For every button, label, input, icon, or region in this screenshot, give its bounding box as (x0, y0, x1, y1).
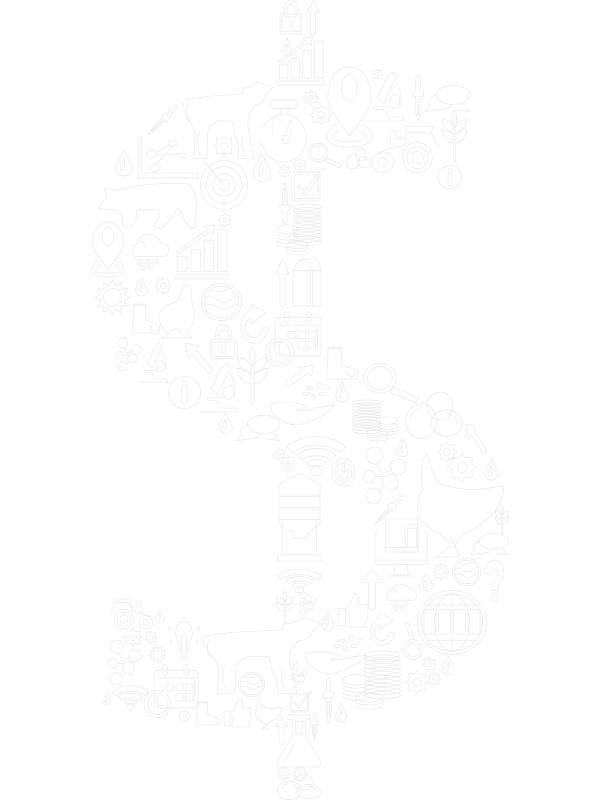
icon: speech bubbles (237, 415, 280, 441)
icon: drop (485, 459, 498, 480)
icon: refresh (370, 613, 395, 645)
icon: clock (144, 690, 171, 718)
icon: hand (305, 652, 367, 674)
icon: drop (420, 573, 432, 591)
icon: gear (422, 657, 436, 672)
icon: gear (303, 90, 319, 105)
icon: gear (278, 165, 291, 178)
icon: gear (155, 277, 171, 295)
icon: seeds (302, 382, 330, 399)
icon: info (438, 165, 462, 189)
icon: gear (213, 135, 235, 157)
icon: pipette (323, 677, 334, 724)
icon: drop (443, 656, 454, 675)
icon: pipette (311, 712, 318, 740)
icon: calendar (154, 665, 198, 708)
icon: wheat (442, 110, 467, 162)
icon: microscope (139, 343, 168, 382)
icon: gear (178, 710, 191, 722)
icon: question mark (484, 560, 504, 602)
icon: coins (343, 651, 400, 709)
icon: seeds (333, 635, 363, 651)
icon: clock (265, 338, 294, 367)
icon: gear (310, 105, 332, 125)
icon: wifi (277, 570, 322, 593)
icon: eggs (346, 149, 371, 169)
icon: molecule (299, 592, 317, 615)
icon: drop (219, 413, 232, 433)
icon: sun (95, 280, 130, 315)
icon: speech bubbles (470, 533, 508, 555)
icon: arrow (185, 343, 213, 374)
icon: eggs (277, 775, 321, 800)
icon: gear (273, 448, 285, 460)
icon: globe (418, 591, 486, 654)
icon: drop (397, 439, 407, 457)
icon: gear (280, 455, 296, 473)
icon: speech bubbles (425, 85, 470, 112)
icon: molecule (108, 640, 141, 685)
icon: magnifier (404, 623, 422, 660)
icon: lock (210, 325, 237, 359)
icon: molecule (363, 447, 406, 504)
icon: gear (293, 158, 307, 172)
icon: cow (183, 82, 273, 158)
icon: gear (372, 69, 383, 80)
icon: calendar (275, 312, 321, 356)
icon: up arrow (363, 569, 381, 610)
icon: magnifier (364, 363, 419, 403)
icon: microscope (201, 363, 238, 412)
icon: drop (253, 153, 271, 182)
icon: up arrow (276, 258, 289, 307)
icon: hen (255, 697, 282, 729)
icon: clock (293, 767, 307, 781)
icon: drop (336, 382, 348, 402)
icon: boot (327, 347, 358, 379)
icon: up arrow (275, 717, 288, 745)
icon: gear (428, 672, 441, 686)
icon: coins (277, 204, 322, 255)
icon: globe dish (201, 283, 242, 321)
icon: tractor (372, 126, 439, 173)
icon: microscope (367, 72, 404, 121)
icon: cloud (387, 584, 417, 610)
icon: gear (218, 213, 232, 227)
icon: gear (405, 670, 429, 694)
icon: wheat (237, 347, 268, 405)
icon: drop (136, 277, 147, 296)
icon: light bulb (168, 617, 200, 661)
icon: coins (352, 400, 398, 441)
icon: bar chart (175, 225, 228, 279)
icon: globe dish (452, 558, 481, 586)
icon: thumbs up (224, 698, 251, 727)
icon: hen (159, 285, 194, 338)
icon: target (200, 160, 248, 210)
icon: drop (156, 609, 164, 623)
icon: gear (447, 453, 477, 482)
dollar sign icon mosaic (92, 0, 509, 800)
icon: server tower (277, 473, 322, 561)
icon: hand (270, 402, 335, 425)
icon: large hen (417, 453, 504, 557)
icon: checkbox (292, 169, 325, 201)
icon: lock (280, 0, 302, 34)
icon: thumbs up (338, 593, 368, 627)
icon: drop (336, 703, 346, 722)
icon: chart with molecule (138, 137, 198, 178)
icon: drop (282, 38, 292, 56)
icon: molecule (292, 663, 307, 688)
icon: wheat (276, 591, 294, 623)
icon: bar chart (277, 37, 324, 85)
icon: boot (196, 702, 220, 725)
icon: stopwatch (261, 100, 306, 162)
icon: arrow (285, 365, 314, 387)
icon: location pin (327, 67, 372, 147)
icon: wifi (112, 686, 149, 710)
icon: gear (437, 442, 457, 462)
icon: drop (102, 692, 111, 705)
icon: magnifier (308, 143, 342, 168)
icon: sun (149, 646, 166, 663)
icon: power button (332, 458, 355, 486)
icon: checkbox (290, 691, 312, 712)
icon: up arrow (307, 0, 319, 36)
icon: pig (98, 183, 196, 229)
icon: arrow (466, 424, 487, 455)
icon: computer devices (375, 519, 427, 576)
icon: globe dish (238, 672, 265, 697)
icon: gear (433, 563, 449, 580)
icon: pipette (145, 103, 180, 138)
icon: flask (277, 715, 321, 767)
icon: tractor (110, 599, 153, 629)
icon: drop (323, 610, 333, 631)
icon: cow (203, 618, 323, 693)
icon: drop (116, 150, 132, 176)
icon: eggs (406, 392, 462, 439)
icon: pipette (372, 493, 406, 527)
icon: wifi (287, 437, 346, 476)
icon: gear (145, 631, 157, 644)
icon: gear (123, 628, 143, 647)
icon: cloud (132, 234, 169, 270)
icon: refresh (241, 304, 268, 343)
icon: wheat (495, 505, 509, 536)
icon: inverted pipette (280, 182, 290, 224)
icon: boot (132, 304, 160, 333)
icon: molecule (116, 338, 141, 371)
icon: info (168, 376, 201, 409)
icon: pipette (412, 75, 424, 122)
icon: package (293, 259, 321, 306)
icon: gear (277, 767, 290, 780)
icon: location pin (92, 222, 124, 277)
